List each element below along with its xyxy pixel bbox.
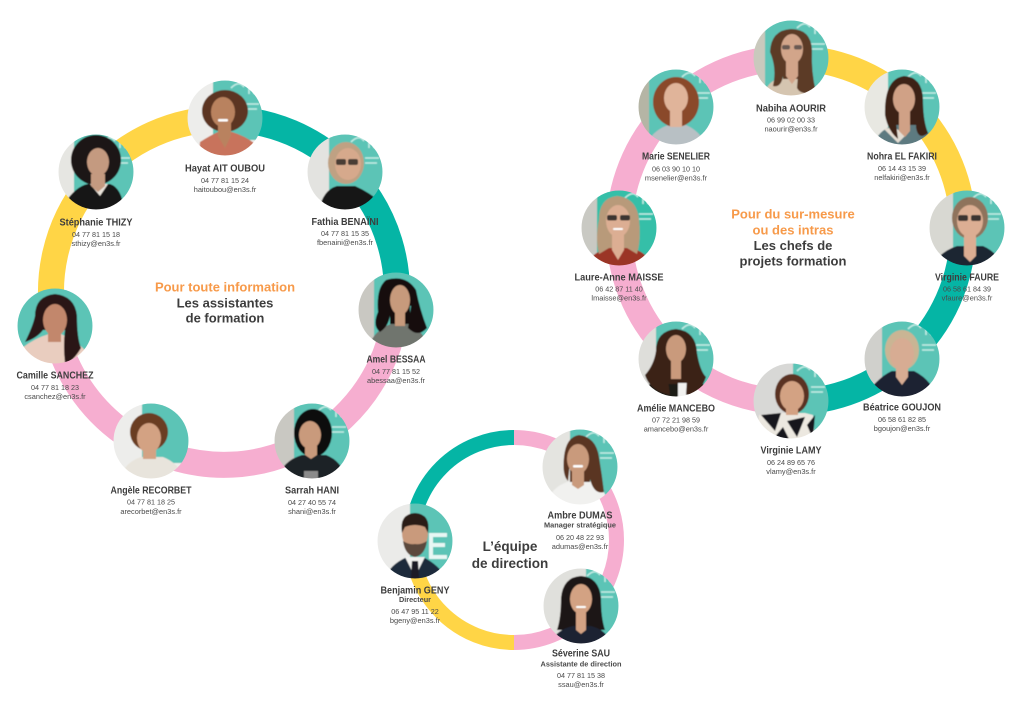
person: Virginie LAMY: Virginie LAMY <box>760 446 822 456</box>
person: Benjamin GENY: 06 47 95 11 22 <box>391 607 439 616</box>
person: Fathia BENAÏNI: Fathia BENAÏNI <box>312 215 379 228</box>
person: Nabiha AOURIR: 06 99 02 00 33 <box>767 116 815 124</box>
person: Stéphanie THIZY: Stéphanie THIZY <box>60 218 133 228</box>
person: Angèle RECORBET: 04 77 81 18 25 <box>127 498 175 507</box>
person: Angèle RECORBET <box>110 403 192 516</box>
person: Sarrah HANI <box>274 403 350 516</box>
person: Sarrah HANI: 04 27 40 55 74 <box>288 498 336 507</box>
person: Stéphanie THIZY <box>58 134 134 248</box>
photo: Virginie Faure <box>929 190 1005 266</box>
person: Marie SENELIER: 06 03 90 10 10 <box>652 164 700 174</box>
heading: équipe de direction: L’équipe <box>483 539 538 554</box>
person: Ambre DUMAS: Ambre DUMAS <box>548 510 613 522</box>
person: Séverine SAU: Séverine SAU <box>552 648 610 660</box>
person: Hayat AIT OUBOU: haitoubou@en3s.fr <box>194 185 257 194</box>
person: Laure-Anne MAISSE: lmaisse@en3s.fr <box>591 294 647 302</box>
person: Amel BESSAA: 04 77 81 15 52 <box>372 367 420 376</box>
heading: équipe de direction <box>472 539 548 571</box>
photo: Laure-Anne <box>581 190 657 266</box>
person: Nohra EL FAKIRI <box>864 69 940 182</box>
photo: Stéphanie <box>58 134 134 210</box>
photo: Marie <box>638 69 714 145</box>
person: Béatrice GOUJON: 06 58 61 82 85 <box>878 415 926 424</box>
person: Stéphanie THIZY: 04 77 81 15 18 <box>72 230 120 239</box>
photo: Virginie Lamy <box>753 363 829 439</box>
person: Virginie FAURE: vfaure@en3s.fr <box>942 294 993 302</box>
photo: Séverine <box>543 568 619 644</box>
person: Angèle RECORBET: arecorbet@en3s.fr <box>120 507 182 516</box>
person: Camille SANCHEZ: csanchez@en3s.fr <box>24 392 86 401</box>
person: Amélie MANCEBO: amancebo@en3s.fr <box>644 424 709 434</box>
person: Béatrice GOUJON: bgoujon@en3s.fr <box>874 424 931 433</box>
photo: Amel <box>358 272 434 348</box>
person: Benjamin GENY: Directeur <box>399 595 431 604</box>
heading: chefs de projets formation: ou des intras <box>753 222 833 238</box>
person: Camille SANCHEZ <box>16 288 94 401</box>
heading: équipe de direction: de direction <box>472 556 548 571</box>
person: Benjamin GENY <box>377 503 453 625</box>
person: Laure-Anne MAISSE <box>574 190 664 302</box>
person: Marie SENELIER <box>638 69 714 182</box>
person: Virginie FAURE: 06 58 61 84 39 <box>943 284 991 294</box>
person: Séverine SAU: Assistante de direction <box>540 660 622 668</box>
person: Sarrah HANI: shani@en3s.fr <box>288 507 336 516</box>
person: Benjamin GENY: bgeny@en3s.fr <box>390 616 441 625</box>
ring: équipe de direction <box>412 438 616 642</box>
person: Fathia BENAÏNI: 04 77 81 15 35 <box>321 229 369 238</box>
person: Laure-Anne MAISSE: 06 42 87 11 40 <box>595 284 643 294</box>
person: Amel BESSAA: abessaa@en3s.fr <box>367 376 426 385</box>
person: Ambre DUMAS: adumas@en3s.fr <box>552 542 609 551</box>
person: Virginie LAMY <box>753 363 829 476</box>
person: Nohra EL FAKIRI: Nohra EL FAKIRI <box>867 152 937 162</box>
person: Nohra EL FAKIRI: 06 14 43 15 39 <box>878 164 926 173</box>
photo: Camille <box>17 288 93 364</box>
person: Virginie FAURE <box>929 190 1005 302</box>
heading: assistantes de formation <box>155 280 295 326</box>
person: Laure-Anne MAISSE: Laure-Anne MAISSE <box>574 272 664 284</box>
photo: Angèle <box>113 403 189 479</box>
person: Béatrice GOUJON <box>863 321 941 433</box>
photo: Béatrice <box>864 321 940 397</box>
person: Ambre DUMAS <box>542 429 618 551</box>
photo: Sarrah <box>274 403 350 479</box>
person: Béatrice GOUJON: Béatrice GOUJON <box>863 402 941 414</box>
photo: Fathia <box>307 134 383 210</box>
person: Amélie MANCEBO: Amélie MANCEBO <box>637 404 715 414</box>
person: Marie SENELIER: Marie SENELIER <box>642 152 711 162</box>
person: Angèle RECORBET: Angèle RECORBET <box>110 486 192 496</box>
person: Stéphanie THIZY: sthizy@en3s.fr <box>72 239 121 248</box>
person: Virginie LAMY: vlamy@en3s.fr <box>766 467 816 476</box>
heading: chefs de projets formation: projets formation <box>740 254 847 268</box>
photo: Amélie <box>638 321 714 397</box>
heading: chefs de projets formation: Les chefs de <box>754 238 832 253</box>
person: Fathia BENAÏNI <box>307 134 383 247</box>
photo: Ambre <box>542 429 618 505</box>
person: Nohra EL FAKIRI: nelfakiri@en3s.fr <box>874 173 930 182</box>
person: Amel BESSAA: Amel BESSAA <box>366 354 426 366</box>
heading: chefs de projets formation: Pour du sur-mesure <box>731 206 855 222</box>
person: Séverine SAU: ssau@en3s.fr <box>558 680 604 689</box>
person: Séverine SAU: 04 77 81 15 38 <box>557 671 605 680</box>
person: Sarrah HANI: Sarrah HANI <box>285 486 339 496</box>
heading: chefs de projets formation <box>731 206 855 268</box>
photo: Nabiha <box>753 20 829 96</box>
person: Benjamin GENY: Benjamin GENY <box>380 586 450 596</box>
ring: assistantes de formation <box>51 119 397 465</box>
person: Ambre DUMAS: Manager stratégique <box>544 521 616 530</box>
person: Ambre DUMAS: 06 20 48 22 93 <box>556 533 604 542</box>
person: Camille SANCHEZ: Camille SANCHEZ <box>16 370 94 382</box>
photo: Hayat <box>187 80 263 156</box>
person: Nabiha AOURIR: Nabiha AOURIR <box>756 104 827 114</box>
person: Nabiha AOURIR: naourir@en3s.fr <box>764 124 818 134</box>
person: Hayat AIT OUBOU: Hayat AIT OUBOU <box>185 164 265 174</box>
person: Hayat AIT OUBOU: 04 77 81 15 24 <box>201 176 249 185</box>
person: Nabiha AOURIR <box>753 20 829 134</box>
person: Amel BESSAA <box>358 272 434 385</box>
person: Séverine SAU <box>540 568 622 689</box>
ring: chefs de projets formation <box>619 58 963 402</box>
photo: Nohra <box>864 69 940 145</box>
person: Amélie MANCEBO <box>637 321 715 434</box>
person: Camille SANCHEZ: 04 77 81 18 23 <box>31 383 79 392</box>
person: Hayat AIT OUBOU <box>185 80 265 194</box>
photo: Benjamin <box>377 503 453 579</box>
person: Virginie LAMY: 06 24 89 65 76 <box>767 458 815 467</box>
person: Amélie MANCEBO: 07 72 21 98 59 <box>652 416 700 424</box>
person: Marie SENELIER: msenelier@en3s.fr <box>645 174 708 182</box>
heading: assistantes de formation: de formation <box>186 310 264 326</box>
person: Virginie FAURE: Virginie FAURE <box>935 272 999 284</box>
person: Fathia BENAÏNI: fbenaini@en3s.fr <box>317 238 374 247</box>
heading: assistantes de formation: Pour toute information <box>155 280 295 294</box>
heading: assistantes de formation: Les assistantes <box>177 296 273 310</box>
